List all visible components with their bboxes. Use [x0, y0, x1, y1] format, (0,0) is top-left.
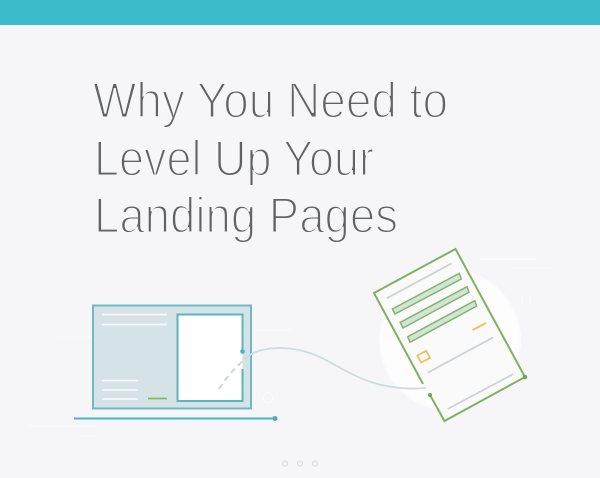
title: Level Up Your	[94, 130, 374, 186]
pagination dots	[282, 461, 318, 466]
landing page illustration: laptop-style panel	[93, 306, 251, 408]
panel background	[93, 306, 251, 408]
green highlighted bars	[392, 273, 477, 342]
yellow checkbox	[417, 351, 430, 363]
white text lines	[102, 314, 167, 399]
white inner page	[178, 314, 242, 401]
page sheet	[374, 249, 525, 421]
connector node	[240, 349, 245, 354]
yellow dash	[473, 323, 486, 330]
outline nodes	[428, 375, 527, 397]
dashed path inside page	[219, 361, 243, 389]
title: Landing Pages	[94, 188, 398, 244]
curved connector between page and document	[243, 348, 426, 389]
baseline with end dot	[74, 416, 278, 421]
title	[93, 72, 448, 244]
top teal bar	[0, 0, 600, 25]
green button line	[148, 398, 167, 400]
background glow circle behind document	[380, 270, 520, 410]
grey text lines	[387, 263, 513, 409]
document rotated page	[374, 249, 527, 421]
inner page outline with gap	[178, 314, 242, 401]
page outline with gap	[374, 249, 525, 421]
title: Why You Need to	[93, 72, 448, 128]
